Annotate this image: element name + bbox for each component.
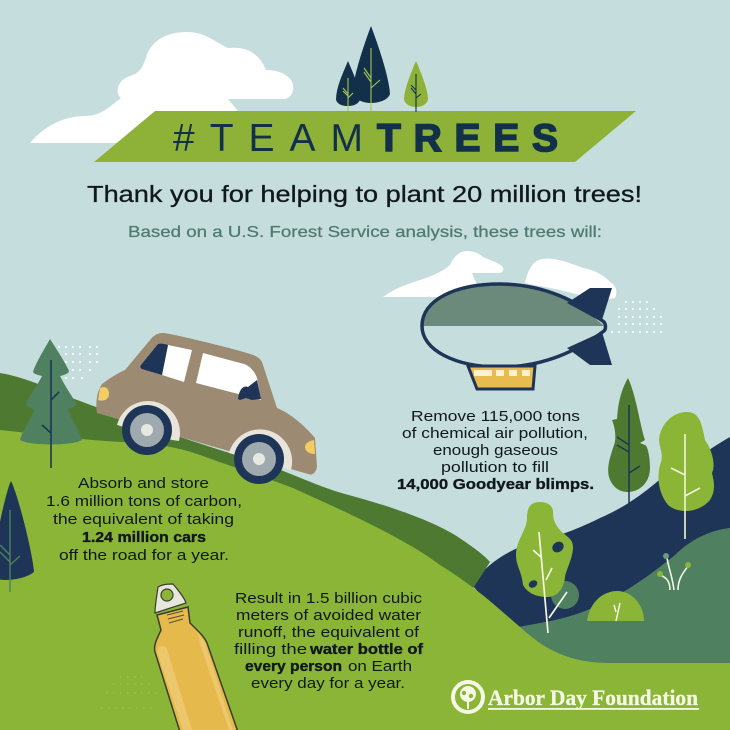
tree: left navy xyxy=(0,481,34,592)
text: water stat: Result in 1.5 billion cubic xyxy=(235,591,422,607)
icon: water bottle xyxy=(155,584,238,730)
blimp gondola xyxy=(468,366,535,389)
title banner xyxy=(94,111,636,162)
text: carbon stat: off the road for a year. xyxy=(59,548,229,564)
banner text: TREES xyxy=(377,117,558,160)
text: water stat: on Earth xyxy=(348,659,412,675)
text: blimp stat: Remove 115,000 tons xyxy=(411,409,580,425)
bush xyxy=(587,591,644,621)
text: blimp stat: of chemical air pollution, xyxy=(402,426,588,442)
text: water stat: every person xyxy=(245,659,342,675)
sprouts xyxy=(657,553,691,590)
banner text: #TEAM xyxy=(173,117,363,160)
bottle cap xyxy=(155,584,186,613)
dotted pattern: bottom left xyxy=(101,676,156,708)
text: water stat: water bottle of xyxy=(309,642,423,658)
subheading: Based on a U.S. Forest Service analysis, these trees will: xyxy=(128,224,602,241)
text: carbon stat xyxy=(46,476,242,564)
heading: Thank you for helping to plant 20 million trees! xyxy=(87,181,642,207)
text: carbon stat: 1.6 million tons of carbon, xyxy=(46,494,242,510)
tree: light green round tree xyxy=(658,412,714,539)
banner text xyxy=(173,117,558,160)
icon: car xyxy=(96,333,317,484)
dotted pattern: sky left xyxy=(58,346,98,379)
hill: teal hill right xyxy=(518,528,730,680)
tree: left evergreen xyxy=(20,339,82,468)
tree: dark green leaf tree xyxy=(608,378,650,503)
dotted pattern: sky right xyxy=(611,301,662,333)
hill: light green foreground xyxy=(0,430,730,730)
text: water stat xyxy=(234,591,423,692)
logo: Arbor Day Foundation: Arbor Day Foundation xyxy=(488,685,698,710)
text: blimp stat: pollution to fill xyxy=(441,460,549,476)
text: water stat: meters of avoided water xyxy=(236,608,421,624)
car windows xyxy=(140,344,261,400)
text: blimp stat: 14,000 Goodyear blimps. xyxy=(397,477,594,493)
car headlights xyxy=(98,387,315,454)
clouds behind blimp xyxy=(383,251,616,300)
hill: navy mountain right xyxy=(472,437,730,640)
tree: lime tree with knots xyxy=(516,502,579,633)
text: water stat: runoff, the equivalent of xyxy=(238,625,420,641)
text: carbon stat: 1.24 million cars xyxy=(82,530,206,546)
hill: dark green back hill xyxy=(0,373,490,600)
text: water stat: filling the xyxy=(234,642,307,658)
icon: blimp xyxy=(422,284,612,389)
text: carbon stat: the equivalent of taking xyxy=(53,512,234,528)
text: blimp stat: enough gaseous xyxy=(433,443,558,459)
text: blimp stat xyxy=(397,409,594,493)
text: water stat: every day for a year. xyxy=(251,676,405,692)
text: carbon stat: Absorb and store xyxy=(78,476,209,492)
icon: three trees on banner xyxy=(336,26,428,112)
cloud behind banner xyxy=(30,32,293,143)
car wheels xyxy=(117,401,292,484)
